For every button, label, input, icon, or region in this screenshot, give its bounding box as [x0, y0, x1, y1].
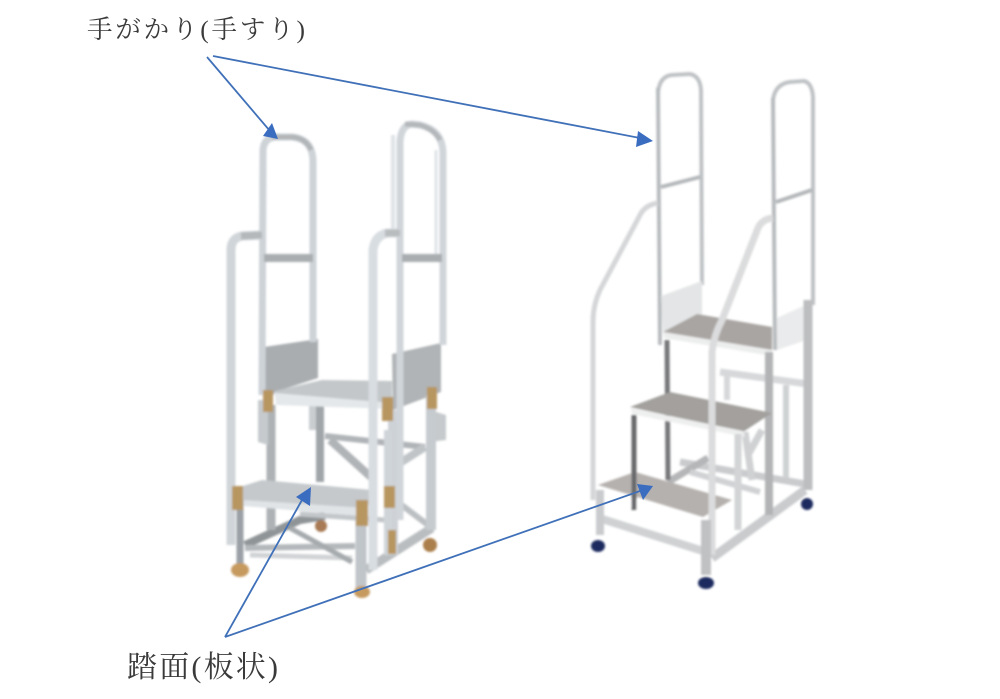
- right ladder: middle step: [630, 392, 772, 437]
- right ladder: top step: [663, 314, 772, 356]
- left ladder: orange brackets and feet: [231, 387, 437, 598]
- left ladder: lower step: [243, 480, 372, 516]
- right ladder: bottom step: [598, 472, 732, 517]
- right ladder: guard panels: [661, 281, 812, 350]
- left ladder: front posts: [231, 233, 431, 590]
- label: handhold (handrail): 手がかり(手すり): [87, 15, 305, 44]
- left ladder: guard panels: [258, 339, 446, 445]
- right ladder: handrails: [658, 74, 813, 350]
- right ladder: base frame: [602, 372, 808, 558]
- right ladder: navy feet: [591, 498, 813, 589]
- left ladder: top platform: [275, 380, 392, 409]
- right ladder: front posts and side rails: [593, 203, 773, 575]
- left ladder: upper handrails: [262, 124, 443, 520]
- right ladder: rear posts: [667, 300, 808, 515]
- arrow: handhold to left ladder: [207, 57, 278, 139]
- arrow: tread to left ladder: [225, 487, 311, 637]
- label: tread (plate type): 踏面(板状): [127, 651, 278, 684]
- right step ladder: [591, 74, 813, 589]
- arrow: handhold to right ladder: [213, 56, 653, 147]
- arrow: tread to right ladder: [225, 484, 653, 637]
- left ladder: base frame: [245, 405, 432, 570]
- left step ladder: [231, 124, 446, 598]
